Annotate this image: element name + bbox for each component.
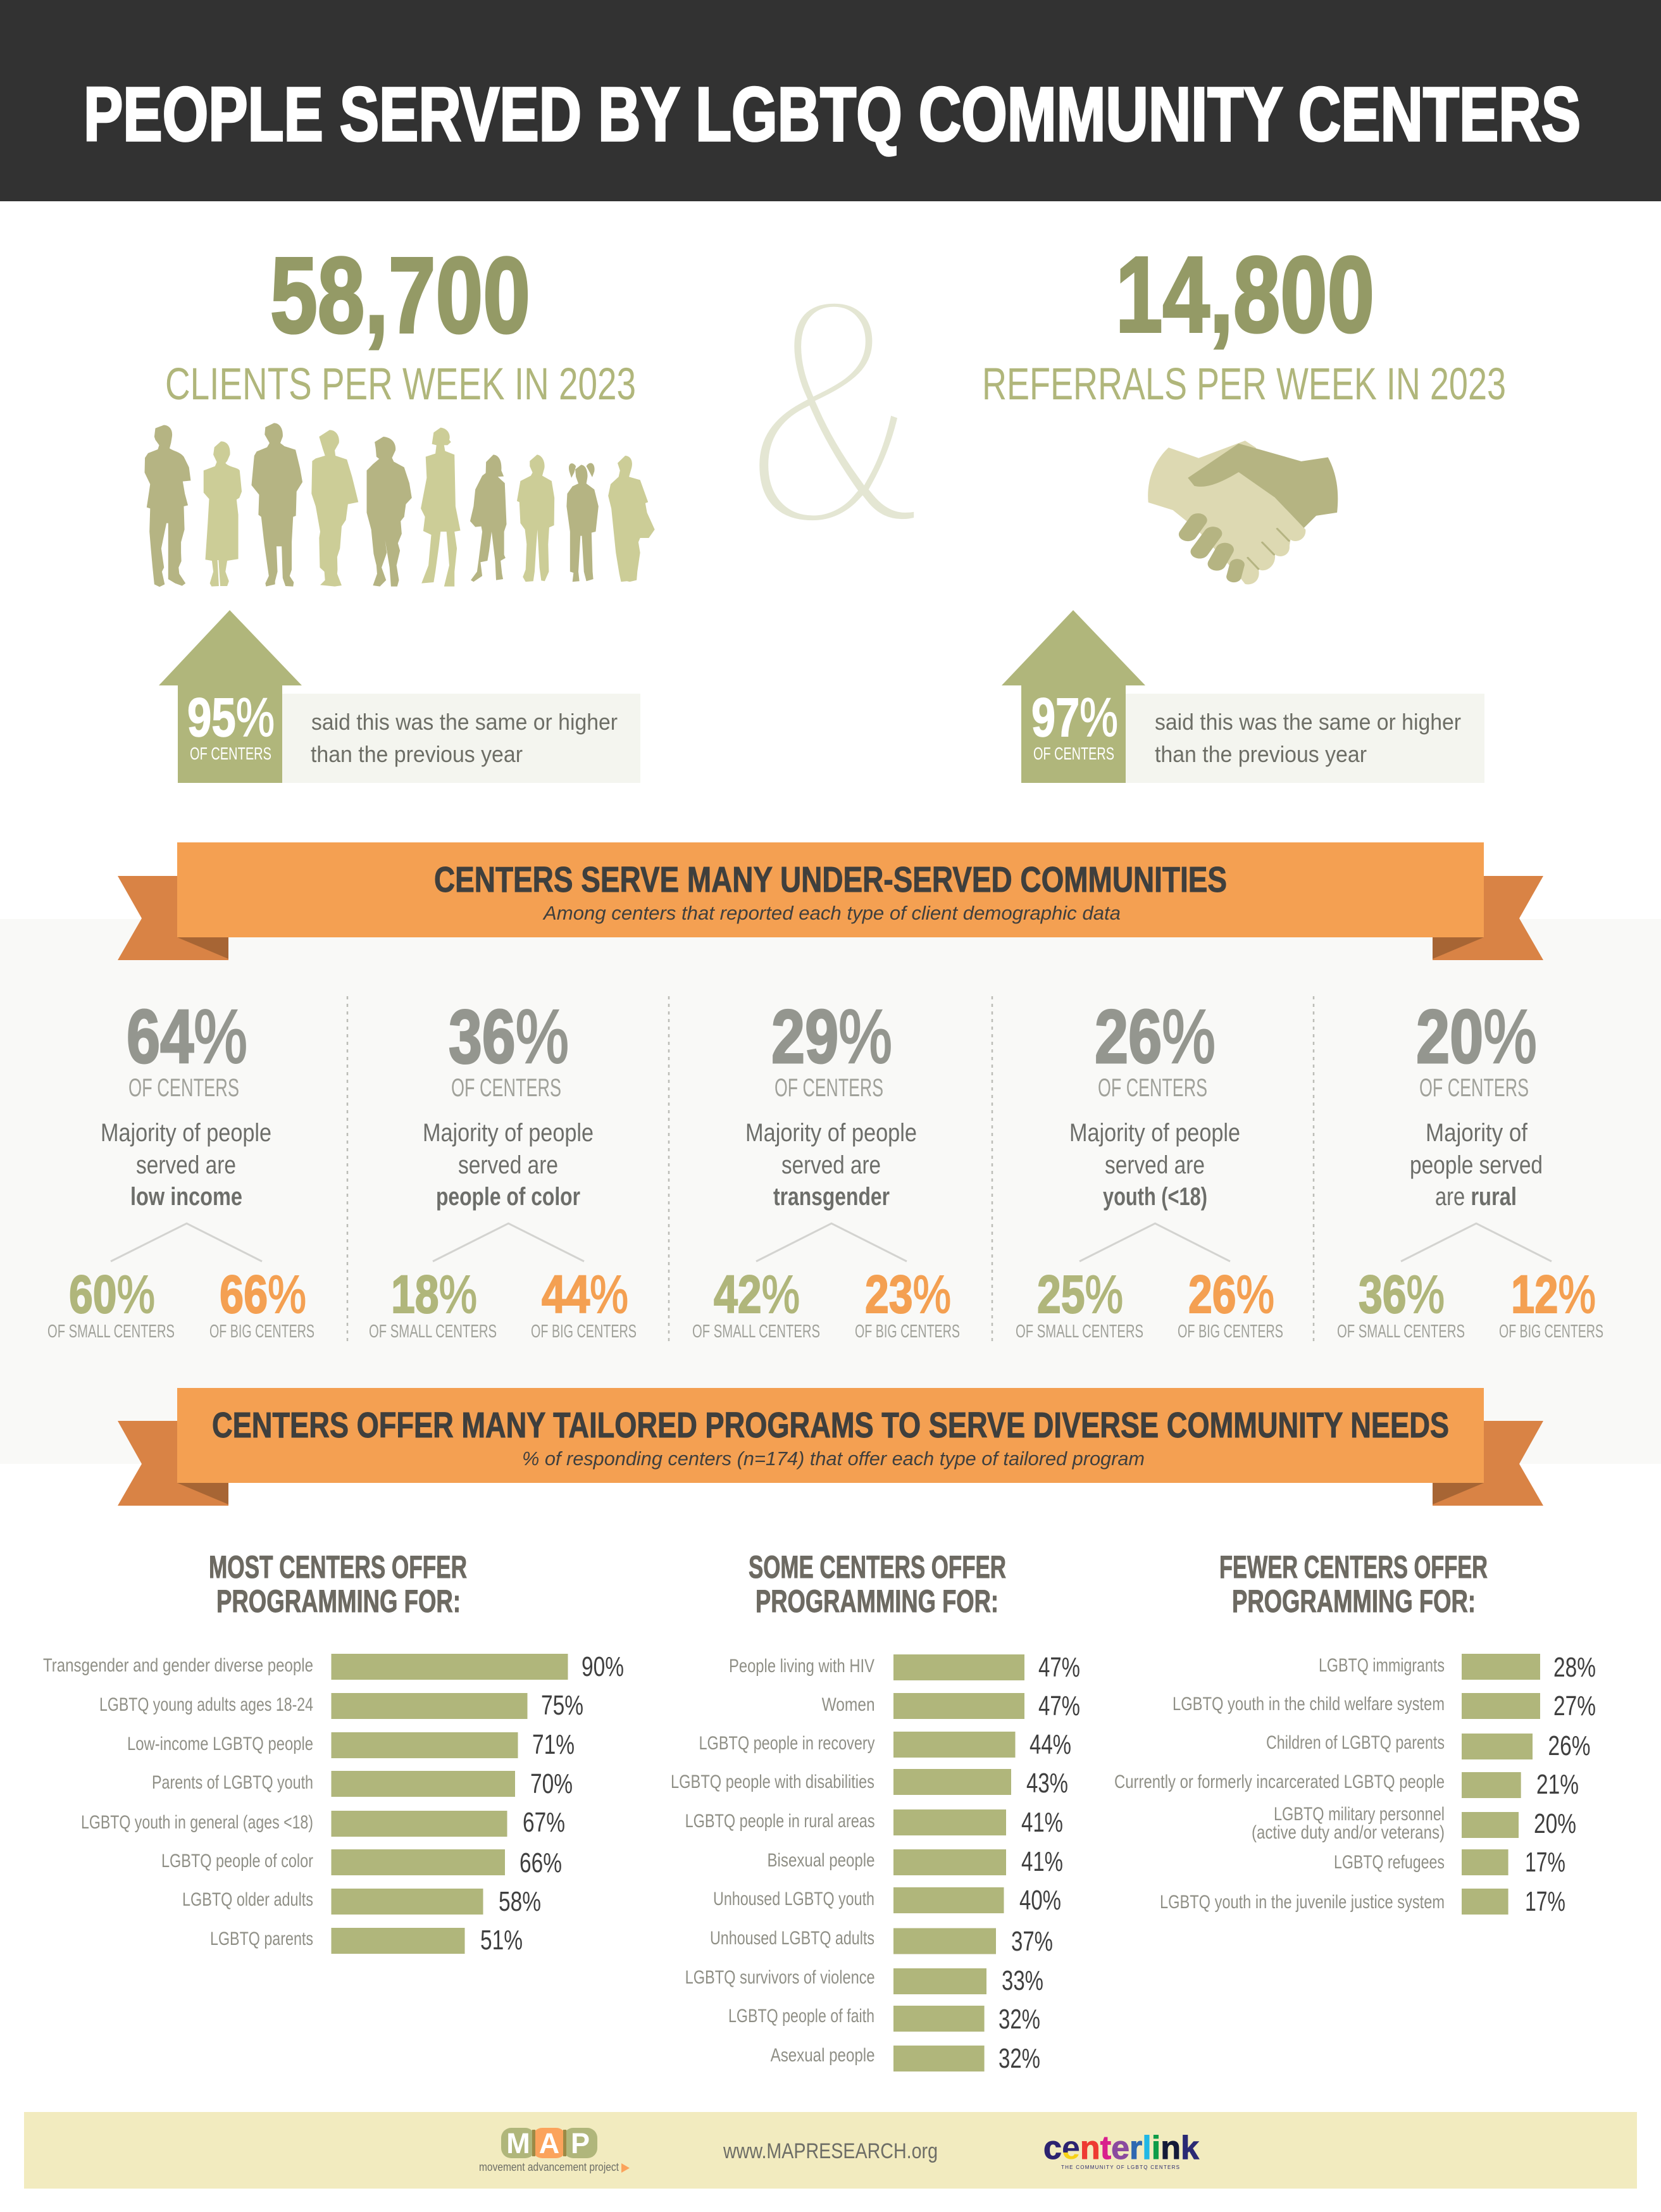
- description: served are: [781, 1151, 881, 1179]
- chart heading: PROGRAMMING FOR:: [216, 1584, 461, 1619]
- description: youth (<18): [1103, 1183, 1207, 1211]
- bar chart: most centers offer: LGBTQ older adults: [182, 1889, 313, 1910]
- small centers stat: 60%: [69, 1265, 155, 1324]
- subheading: clients: CLIENTS PER WEEK IN 2023: [165, 359, 636, 409]
- bar chart: fewer centers offer: LGBTQ youth in the juvenile justice system: [1160, 1892, 1445, 1913]
- bar chart: most centers offer: 90%: [582, 1651, 624, 1682]
- description: people served: [1410, 1151, 1543, 1179]
- bar chart: fewer centers offer: 27%: [1553, 1690, 1596, 1721]
- header band with title: [0, 0, 1661, 201]
- stat: 97% of centers: OF CENTERS: [1033, 744, 1114, 763]
- bar chart: fewer centers offer: [1114, 1549, 1596, 1917]
- bar chart: some centers offer: 47%: [1038, 1690, 1080, 1721]
- stat: 64%: 64%: [127, 994, 247, 1079]
- big number: referrals: 14,800: [1116, 235, 1374, 355]
- bar chart: fewer centers offer: 20%: [1534, 1808, 1576, 1839]
- big centers stat: 12%: [1511, 1265, 1596, 1324]
- bar chart: fewer centers offer: 17%: [1525, 1847, 1565, 1878]
- bar chart: some centers offer: People living with HIV: [729, 1656, 874, 1677]
- small centers stat: OF SMALL CENTERS: [1016, 1322, 1143, 1342]
- chart heading: [749, 1549, 1006, 1619]
- note text: clients: than the previous year: [311, 741, 523, 767]
- big centers stat: [1499, 1265, 1603, 1342]
- bar chart: some centers offer: Women: [822, 1694, 875, 1715]
- bar chart: some centers offer: 47%: [1038, 1652, 1080, 1683]
- small centers stat: [369, 1265, 497, 1342]
- column: low income: [47, 994, 314, 1342]
- bar chart: some centers offer: Asexual people: [771, 2045, 875, 2066]
- column: rural: [1337, 994, 1603, 1342]
- chart heading: [209, 1549, 467, 1619]
- description: transgender: [773, 1183, 890, 1211]
- column: transgender: OF CENTERS: [775, 1074, 883, 1102]
- bar chart: most centers offer: Transgender and gender diverse people: [43, 1655, 313, 1676]
- logo: centerlink: THE COMMUNITY OF LGBTQ CENTERS: [1061, 2165, 1179, 2170]
- small centers stat: 42%: [714, 1265, 800, 1324]
- big centers stat: OF BIG CENTERS: [1178, 1322, 1283, 1342]
- big centers stat: OF BIG CENTERS: [209, 1322, 314, 1342]
- big number: clients: 58,700: [270, 235, 530, 356]
- website url: www.MAPRESEARCH.org: [723, 2139, 938, 2163]
- description: Majority of people: [101, 1119, 271, 1147]
- description: are rural: [1435, 1183, 1517, 1211]
- bar chart: some centers offer: Unhoused LGBTQ adults: [710, 1928, 874, 1949]
- bar chart: most centers offer: [43, 1549, 624, 1956]
- bar chart: fewer centers offer: 17%: [1525, 1886, 1565, 1917]
- small centers stat: 25%: [1037, 1265, 1123, 1324]
- bar chart: some centers offer: LGBTQ people of faith: [728, 2006, 874, 2027]
- subheading: referrals: REFERRALS PER WEEK IN 2023: [982, 359, 1506, 409]
- logo: MAP: A: [539, 2127, 559, 2159]
- icon: handshake: [1148, 441, 1338, 584]
- banner heading: CENTERS SERVE MANY UNDER-SERVED COMMUNITIES: [434, 859, 1227, 900]
- bar chart: most centers offer: LGBTQ youth in general (ages <18): [81, 1812, 313, 1833]
- stat: 95% of centers: 95%: [187, 687, 275, 748]
- description: [745, 1119, 917, 1211]
- big centers stat: [531, 1265, 637, 1342]
- banner subheading: % of responding centers (n=174) that offer each type of tailored program: [522, 1447, 1145, 1470]
- bar chart: fewer centers offer: LGBTQ military personnel: [1274, 1804, 1445, 1825]
- bar chart: most centers offer: LGBTQ parents: [210, 1928, 313, 1949]
- bar chart: fewer centers offer: Children of LGBTQ parents: [1266, 1732, 1445, 1753]
- stat: 36%: 36%: [449, 994, 569, 1079]
- stat: 29%: 29%: [771, 994, 892, 1079]
- bar chart: most centers offer: 70%: [530, 1768, 573, 1799]
- note box: clients: [282, 694, 640, 783]
- description: [101, 1119, 271, 1211]
- description: served are: [136, 1151, 236, 1179]
- small centers stat: [1337, 1265, 1465, 1342]
- panel: clients per week: [145, 235, 655, 783]
- stat: 95% of centers: OF CENTERS: [190, 744, 271, 763]
- chart heading: MOST CENTERS OFFER: [209, 1549, 467, 1585]
- panel: light grey demographics background: [0, 919, 1661, 1464]
- big centers stat: [1178, 1265, 1283, 1342]
- column: low income: OF CENTERS: [128, 1074, 239, 1102]
- description: served are: [458, 1151, 558, 1179]
- logo: MAP: M: [506, 2127, 530, 2159]
- bar chart: some centers offer: LGBTQ people in rural areas: [685, 1811, 875, 1832]
- bar chart: most centers offer: 51%: [480, 1925, 523, 1956]
- bar chart: some centers offer: 33%: [1002, 1965, 1043, 1996]
- description: [1069, 1119, 1240, 1211]
- column: people of color: OF CENTERS: [451, 1074, 561, 1102]
- banner: centers serve many under-served communities: [118, 842, 1543, 960]
- bar chart: some centers offer: Bisexual people: [767, 1850, 874, 1871]
- chart heading: FEWER CENTERS OFFER: [1219, 1549, 1488, 1585]
- panel: referrals per week: [982, 235, 1506, 783]
- column: transgender: [692, 994, 960, 1342]
- bar chart: some centers offer: 41%: [1021, 1846, 1063, 1877]
- note text: clients: [311, 709, 618, 767]
- bar chart: most centers offer: 66%: [519, 1847, 562, 1878]
- column: people of color: [369, 994, 637, 1342]
- description: low income: [130, 1183, 242, 1211]
- small centers stat: [1016, 1265, 1143, 1342]
- note text: clients: said this was the same or higher: [311, 709, 618, 735]
- arrow: up arrow 95 percent: [159, 610, 302, 783]
- bar chart: some centers offer: 32%: [998, 2043, 1040, 2074]
- bar chart: fewer centers offer: (active duty and/or veterans): [1252, 1822, 1445, 1843]
- bar chart: some centers offer: 32%: [998, 2004, 1040, 2035]
- note text: referrals: said this was the same or higher: [1155, 709, 1461, 735]
- bar chart: fewer centers offer: LGBTQ immigrants: [1319, 1655, 1445, 1676]
- note text: referrals: [1155, 709, 1461, 767]
- note text: referrals: than the previous year: [1155, 741, 1367, 767]
- description: Majority of people: [423, 1119, 594, 1147]
- bar chart: some centers offer: LGBTQ survivors of violence: [685, 1967, 875, 1988]
- banner subheading: Among centers that reported each type of client demographic data: [542, 902, 1121, 924]
- big centers stat: 23%: [865, 1265, 951, 1324]
- bar chart: most centers offer: Parents of LGBTQ youth: [152, 1772, 313, 1793]
- bar chart: some centers offer: 41%: [1021, 1807, 1063, 1838]
- footer band: [24, 2112, 1637, 2189]
- chart heading: SOME CENTERS OFFER: [749, 1549, 1006, 1585]
- chart heading: [1219, 1549, 1488, 1619]
- bar chart: most centers offer: 71%: [532, 1729, 575, 1760]
- big centers stat: [209, 1265, 314, 1342]
- logo: MAP: movement advancement project: [479, 2161, 619, 2173]
- bar chart: most centers offer: Low-income LGBTQ people: [127, 1734, 313, 1754]
- note box: referrals: [1126, 694, 1484, 783]
- description: people of color: [436, 1183, 580, 1211]
- description: Majority of: [1426, 1119, 1528, 1147]
- column: rural: OF CENTERS: [1419, 1074, 1529, 1102]
- small centers stat: 18%: [391, 1265, 477, 1324]
- stat: 26%: 26%: [1095, 994, 1216, 1079]
- bar chart: some centers offer: 40%: [1019, 1885, 1061, 1916]
- small centers stat: OF SMALL CENTERS: [47, 1322, 175, 1342]
- stat: 20%: 20%: [1416, 994, 1537, 1079]
- bar chart: most centers offer: 58%: [499, 1886, 541, 1917]
- big centers stat: OF BIG CENTERS: [855, 1322, 960, 1342]
- icon: group of people silhouettes: [145, 423, 655, 587]
- logo: MAP: [479, 2127, 630, 2173]
- column: youth: OF CENTERS: [1098, 1074, 1207, 1102]
- bar chart: some centers offer: [671, 1549, 1080, 2074]
- big centers stat: OF BIG CENTERS: [1499, 1322, 1603, 1342]
- small centers stat: [692, 1265, 820, 1342]
- column: youth: [1016, 994, 1283, 1342]
- bar chart: fewer centers offer: LGBTQ refugees: [1334, 1852, 1445, 1873]
- small centers stat: OF SMALL CENTERS: [1337, 1322, 1465, 1342]
- small centers stat: [47, 1265, 175, 1342]
- bar chart: some centers offer: LGBTQ people with disabilities: [671, 1771, 874, 1792]
- bar chart: most centers offer: 67%: [523, 1807, 565, 1838]
- bar chart: some centers offer: 44%: [1030, 1729, 1071, 1760]
- bar chart: some centers offer: 43%: [1026, 1768, 1068, 1799]
- big centers stat: 66%: [220, 1265, 306, 1324]
- bar chart: fewer centers offer: Currently or formerly incarcerated LGBTQ people: [1114, 1771, 1445, 1792]
- arrow: up arrow 97 percent: [1002, 610, 1145, 783]
- chart heading: PROGRAMMING FOR:: [1232, 1584, 1476, 1619]
- bar chart: some centers offer: 37%: [1011, 1926, 1053, 1957]
- stat: 97% of centers: 97%: [1031, 687, 1118, 748]
- description: [1410, 1119, 1543, 1211]
- bar chart: fewer centers offer: 26%: [1548, 1730, 1591, 1761]
- bar chart: some centers offer: LGBTQ people in recovery: [699, 1733, 874, 1754]
- bar chart: most centers offer: 75%: [541, 1690, 583, 1721]
- big centers stat: 44%: [542, 1265, 628, 1324]
- bar chart: fewer centers offer: 21%: [1536, 1769, 1579, 1800]
- chart heading: PROGRAMMING FOR:: [756, 1584, 998, 1619]
- bar chart: fewer centers offer: 28%: [1553, 1652, 1596, 1683]
- ampersand: &: [743, 224, 925, 596]
- bar chart: most centers offer: LGBTQ people of color: [161, 1851, 313, 1871]
- small centers stat: OF SMALL CENTERS: [692, 1322, 820, 1342]
- description: served are: [1105, 1151, 1205, 1179]
- bar chart: fewer centers offer: LGBTQ youth in the child welfare system: [1173, 1694, 1445, 1715]
- banner: centers offer many tailored programs: [118, 1388, 1543, 1506]
- logo: centerlink: centerlink: [1043, 2130, 1199, 2166]
- big centers stat: [855, 1265, 960, 1342]
- small centers stat: 36%: [1359, 1265, 1445, 1324]
- bar chart: some centers offer: Unhoused LGBTQ youth: [713, 1889, 874, 1909]
- bar chart: most centers offer: LGBTQ young adults ages 18-24: [99, 1694, 313, 1715]
- description: [423, 1119, 594, 1211]
- big centers stat: 26%: [1188, 1265, 1274, 1324]
- description: Majority of people: [745, 1119, 917, 1147]
- small centers stat: OF SMALL CENTERS: [369, 1322, 497, 1342]
- description: Majority of people: [1069, 1119, 1240, 1147]
- big centers stat: OF BIG CENTERS: [531, 1322, 637, 1342]
- logo: MAP: P: [571, 2127, 590, 2159]
